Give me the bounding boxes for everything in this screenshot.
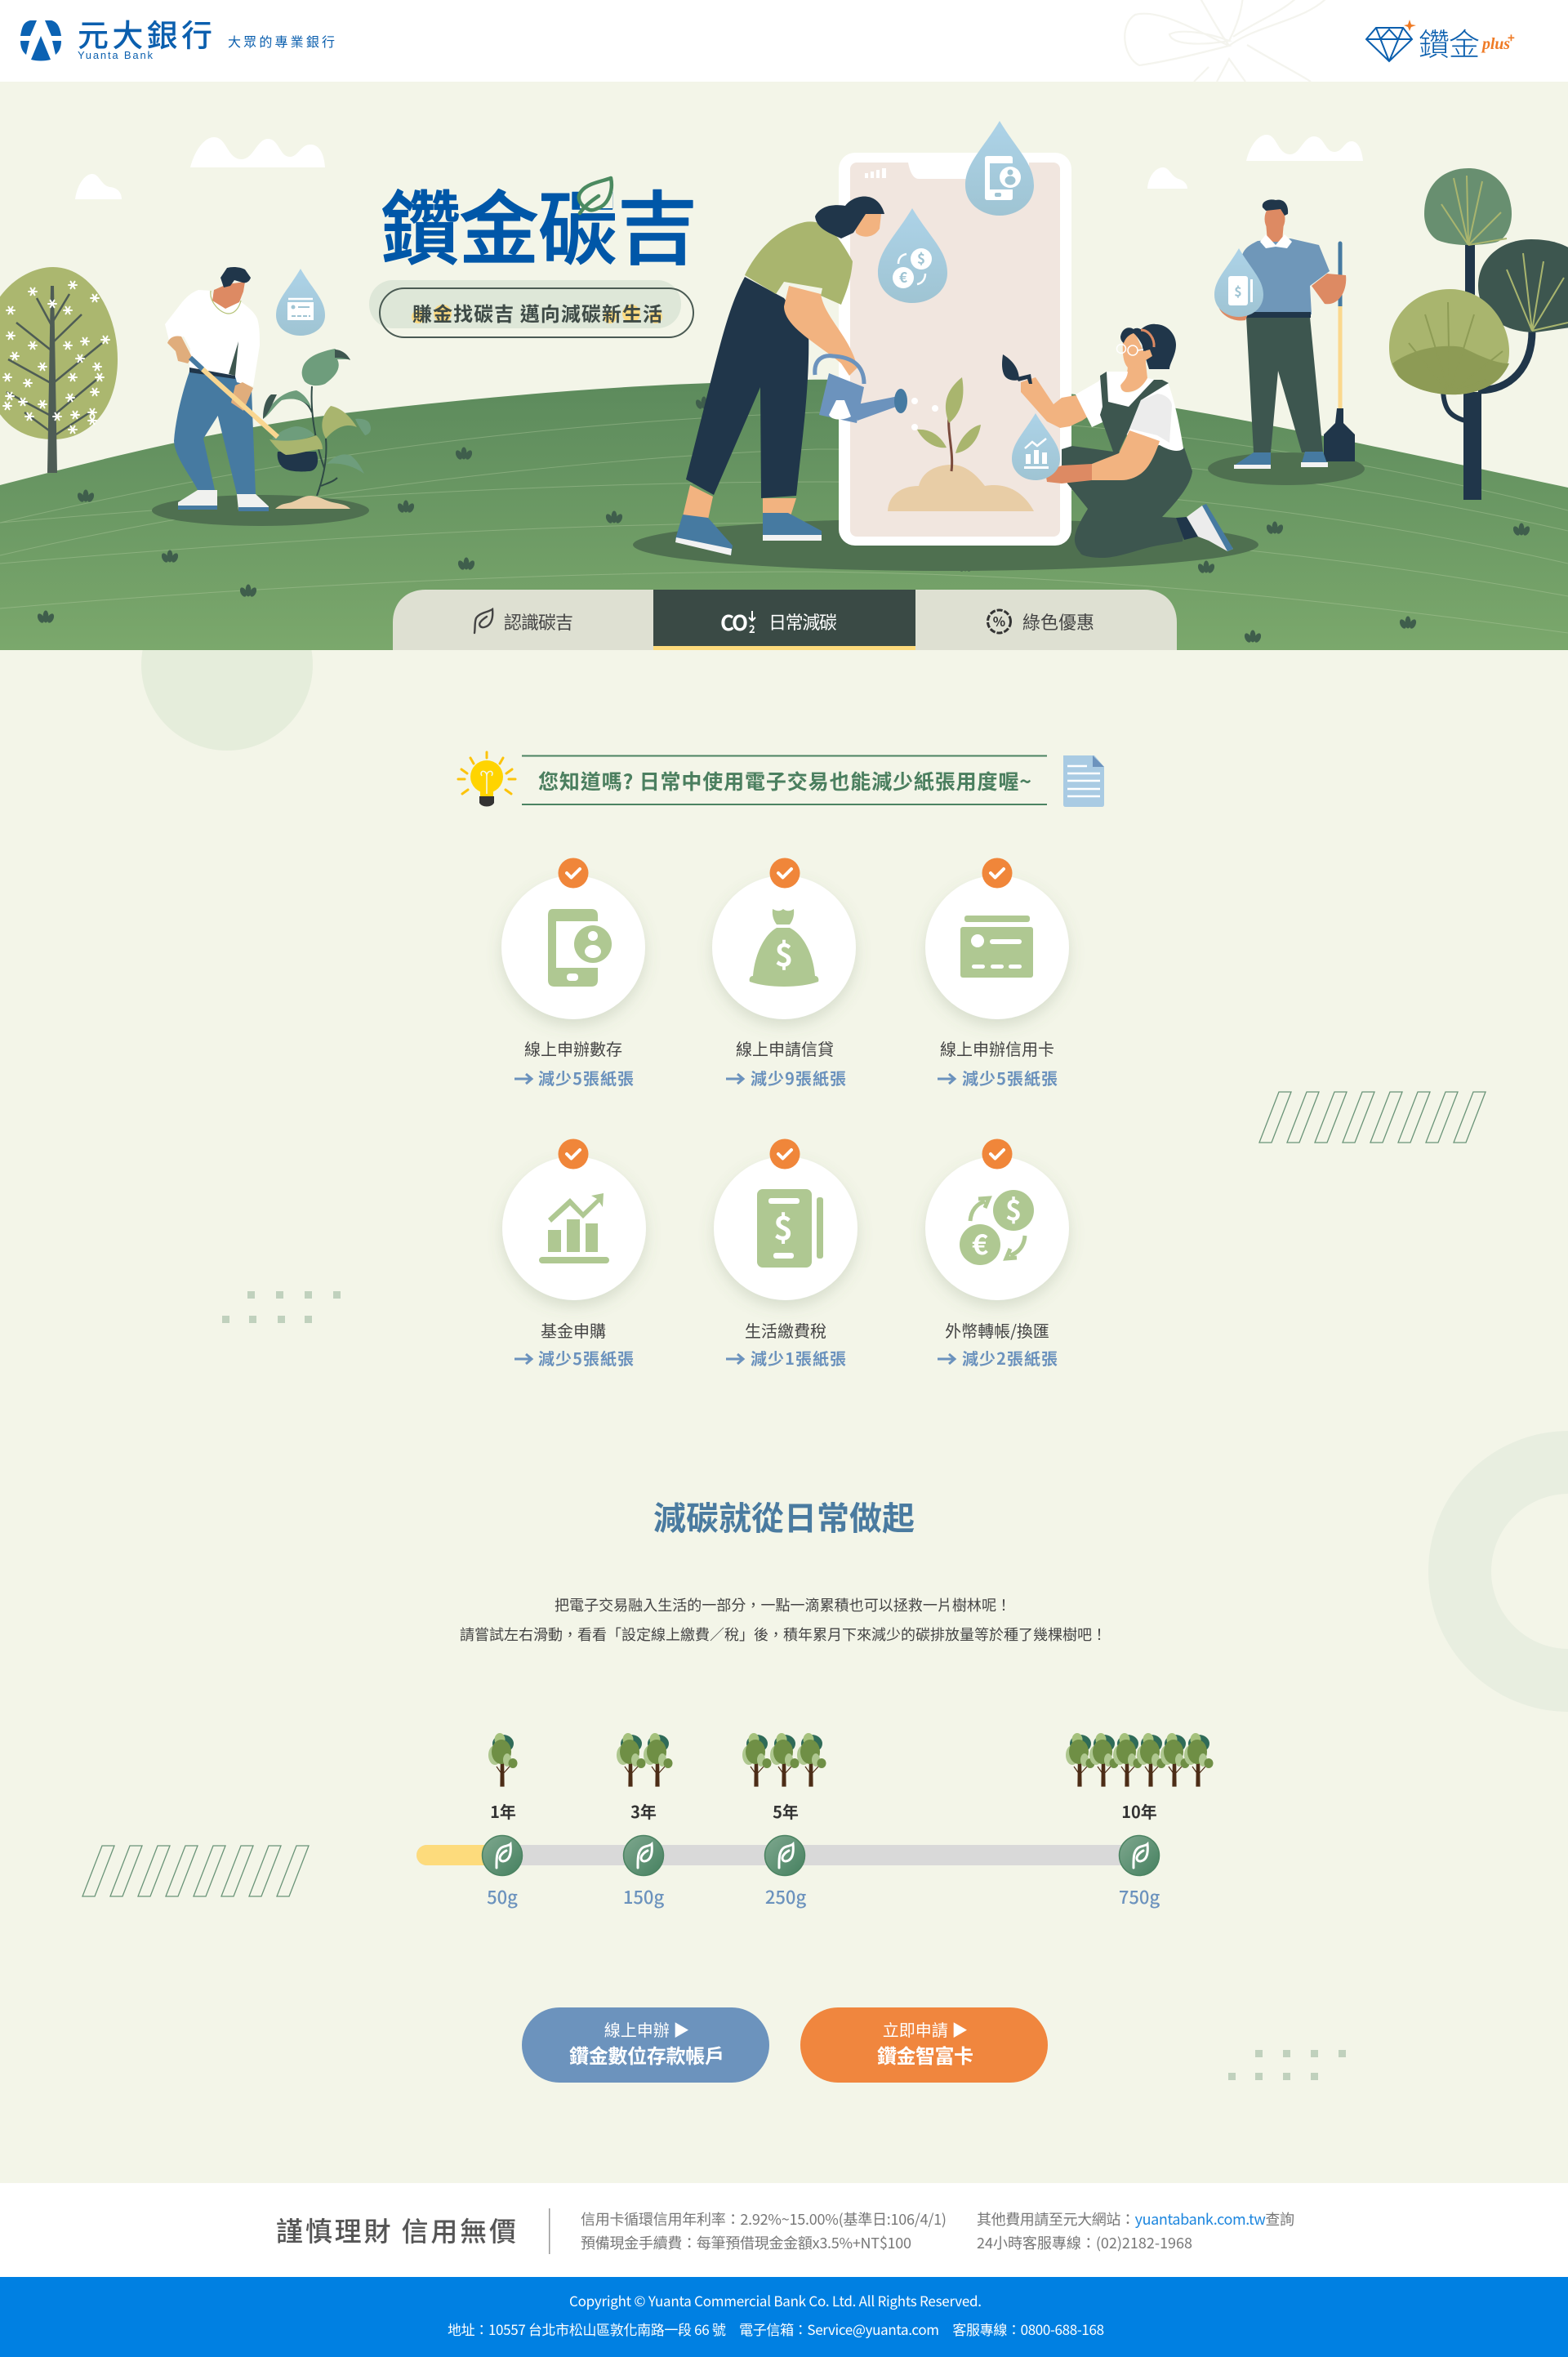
right hand: [1045, 464, 1092, 483]
footer blue bar: 地址：10557 台北市松山區敦化南路一段 66 號 電子信箱：Service@yuanta.com 客服專線：0800-688-168: [448, 2319, 1104, 2339]
button: digital deposit: 鑽金數位存款帳戶: [569, 2040, 724, 2069]
hair back: [1139, 324, 1176, 369]
button: credit card: [800, 2007, 1048, 2083]
drop: bill: [1214, 248, 1263, 317]
hand under drop: [1218, 301, 1250, 321]
did you know banner: 您知道嗎? 日常中使用電子交易也能減少紙張用度喔~: [538, 766, 1031, 795]
shirt shadow: [229, 341, 238, 376]
item: bill payment: 生活繳費稅: [745, 1318, 826, 1342]
year labels: 3年: [630, 1799, 657, 1823]
watermark flower: [1125, 0, 1329, 82]
tab: daily: CO: [720, 607, 748, 637]
face: [1264, 205, 1285, 233]
footer blue bar: Copyright © Yuanta Commercial Bank Co. Ltd. All Rights Reserved.: [569, 2290, 982, 2310]
collar: [211, 291, 241, 314]
arm: [784, 286, 858, 376]
footer notice: 謹慎理財 信用無價: [276, 2210, 516, 2249]
logo: Yuanta Bank: 大眾的專業銀行: [228, 31, 335, 51]
year labels: [490, 1799, 1157, 1823]
intro paragraph: 請嘗試左右滑動，看看「設定線上繳費／稅」後，積年累月下來減少的碳排放量等於種了幾棵樹吧！: [460, 1624, 1107, 1645]
hair: [220, 267, 251, 287]
item: fund subscription: 基金申購: [541, 1318, 606, 1342]
trousers: [174, 372, 256, 494]
subtitle pill: 賺金找碳吉 邁向減碳新生活: [412, 298, 662, 327]
icon: currency exchange: €: [972, 1223, 988, 1263]
man digging with plant: [152, 267, 371, 526]
phone notch: [908, 163, 1029, 179]
neck: [1266, 222, 1284, 242]
hair: [1263, 199, 1288, 216]
decorative hatch left: [82, 1846, 309, 1896]
collar: [1260, 234, 1292, 248]
item: foreign exchange: 減少2張紙張: [962, 1346, 1058, 1370]
gram labels: 750g: [1119, 1883, 1160, 1909]
tab: offers: [988, 608, 1094, 635]
white sweater: [165, 290, 260, 386]
olive crown: [1389, 289, 1509, 394]
right man with shovel: [1208, 199, 1365, 485]
drop: currency: $: [917, 247, 925, 268]
shadow under central figures: [633, 519, 1258, 571]
item: online deposit account: 減少5張紙張: [538, 1066, 634, 1089]
trousers: [1246, 317, 1323, 452]
footer notice: 信用卡循環信用年利率：2.92%~15.00%(基準日:106/4/1): [581, 2208, 947, 2230]
logo: diamond plus: [1366, 20, 1515, 65]
footer blue bar: [0, 2277, 1568, 2357]
shovel: [1324, 243, 1355, 461]
shoes: [1234, 452, 1328, 469]
decorative hatch right: [1259, 1092, 1486, 1143]
seedling mound: [888, 465, 1034, 511]
year labels: 5年: [773, 1799, 799, 1823]
button: credit card: 鑽金智富卡: [877, 2040, 973, 2069]
icon: card: [960, 916, 1033, 978]
icon: bill: $: [773, 1202, 793, 1250]
drop: phone: [965, 121, 1034, 216]
tab: learn: 認識碳吉: [504, 608, 573, 635]
right trees: [1389, 168, 1568, 500]
glasses: [1117, 345, 1143, 355]
plant: [263, 349, 371, 496]
shoe: [1187, 506, 1233, 551]
icon: money bag: [750, 909, 818, 987]
right arm: [1092, 430, 1160, 480]
standing woman watering: [675, 196, 938, 555]
neck and face: [212, 282, 245, 309]
progress: [416, 1845, 502, 1865]
tree icons: [488, 1733, 1214, 1786]
face: [1123, 333, 1152, 369]
hero illustration: [0, 82, 1568, 650]
year labels: 10年: [1121, 1799, 1157, 1823]
gram labels: 150g: [623, 1883, 664, 1909]
icon: currency exchange: [960, 1188, 1034, 1265]
logo: diamond plus: plus: [1481, 35, 1510, 53]
logo: Yuanta Bank: 元大銀行: [78, 11, 212, 56]
white shirt: [1076, 372, 1184, 453]
spade handle: [203, 369, 278, 437]
title leaf: [579, 178, 612, 213]
logo: diamond plus: +: [1508, 29, 1515, 47]
headband: [1141, 330, 1154, 347]
tab: daily: [720, 607, 837, 637]
decorative dots right: [1228, 2050, 1346, 2080]
clouds: [75, 135, 1363, 199]
icon: chart: [539, 1193, 609, 1263]
sock: [1176, 517, 1198, 540]
drop with card icon: [276, 269, 325, 336]
belt: [189, 368, 235, 379]
top crown: [1424, 168, 1512, 245]
left arm: [1021, 377, 1090, 428]
shoes: [675, 513, 822, 555]
did you know banner: [458, 752, 1104, 807]
hill: [0, 380, 1568, 650]
item: fund subscription: [502, 1138, 646, 1370]
drop: chart: [1012, 413, 1060, 480]
soil mound: [275, 496, 350, 509]
item: online loan: 線上申請信貸: [736, 1036, 834, 1060]
grey sleeve: [1129, 394, 1172, 443]
trowel: [1002, 354, 1032, 384]
intro paragraph: [460, 1594, 1107, 1645]
legs: [683, 485, 796, 519]
tab bar: [393, 590, 1177, 650]
title leaf cut-out: [580, 180, 612, 208]
item: online deposit account: [501, 858, 645, 1089]
header bar: [0, 0, 1568, 82]
drop: currency: [878, 208, 947, 303]
shoes: [178, 490, 269, 510]
gram labels: 50g: [487, 1883, 518, 1909]
icon: money bag: $: [775, 930, 793, 975]
signal bars: [865, 168, 886, 178]
green top: [745, 221, 853, 305]
hair: [815, 196, 884, 238]
button: digital deposit: [522, 2007, 769, 2083]
phone: [839, 153, 1071, 546]
hands: [167, 336, 253, 411]
timeline slider: [416, 1733, 1214, 1909]
item: online loan: 減少9張紙張: [751, 1066, 846, 1089]
watering can: [815, 356, 938, 430]
trousers: [686, 277, 808, 498]
logo mark: [20, 20, 61, 60]
polo shirt: [1241, 238, 1330, 314]
icon: currency exchange: $: [1005, 1188, 1022, 1228]
item: online credit card: [925, 858, 1069, 1089]
button: digital deposit: 線上申辦 ▶: [604, 2017, 689, 2041]
icon: phone: [548, 909, 612, 987]
kneeling woman: [1002, 324, 1233, 558]
intro paragraph: 把電子交易融入生活的一部分，一點一滴累積也可以拯救一片樹林呢！: [555, 1594, 1011, 1615]
grass tufts: [36, 397, 1531, 644]
footer notice: 預備現金手續費：每筆預借現金金額x3.5%+NT$100: [581, 2232, 911, 2253]
drop: currency: €: [899, 266, 907, 287]
decorative ring right: [1428, 1431, 1568, 1712]
dark crown: [1478, 239, 1568, 332]
neck: [1120, 363, 1147, 392]
arm: [1312, 274, 1346, 304]
decorative circle top-left: [141, 579, 313, 751]
gram labels: 250g: [765, 1883, 806, 1909]
footer notice: [0, 2183, 1568, 2277]
logo: Yuanta Bank: [20, 11, 335, 61]
title: 鑽金碳吉: [381, 165, 697, 281]
tab: offers: 綠色優惠: [1022, 608, 1094, 635]
icon: document: [1063, 755, 1104, 807]
gram labels: [487, 1883, 1160, 1909]
section heading: 減碳就從日常做起: [653, 1492, 915, 1539]
decorative dots left: [222, 1291, 341, 1323]
tab: daily: 2: [749, 621, 755, 636]
flowering tree left: [0, 267, 118, 473]
item: foreign exchange: [925, 1138, 1069, 1370]
item: bill payment: 減少1張紙張: [751, 1346, 846, 1370]
seedling: [917, 377, 981, 471]
item: bill payment: [714, 1138, 858, 1370]
footer notice: 24小時客服專線：(02)2182-1968: [977, 2232, 1192, 2253]
logo: Yuanta Bank: Yuanta Bank: [78, 49, 154, 61]
face: [854, 214, 881, 237]
hill texture lines: [0, 412, 1568, 633]
year labels: 1年: [490, 1799, 516, 1823]
item: online credit card: 減少5張紙張: [962, 1066, 1058, 1089]
trunks: [1463, 245, 1481, 500]
item: online loan: [712, 858, 856, 1089]
drop: bill: $: [1234, 281, 1242, 301]
nodes: [482, 1836, 1160, 1875]
icon: bill: [757, 1189, 823, 1268]
item: online deposit account: 線上申辦數存: [524, 1036, 622, 1060]
icon: light bulb: [458, 752, 515, 807]
logo: diamond plus: 鑽金: [1419, 20, 1480, 65]
overalls: [1062, 372, 1192, 558]
item: fund subscription: 減少5張紙張: [538, 1346, 634, 1370]
footer notice: 其他費用請至元大網站：yuantabank.com.tw查詢: [977, 2208, 1294, 2230]
subtitle pill: [369, 280, 693, 337]
tab: daily: 日常減碳: [768, 608, 837, 635]
track: [416, 1845, 1135, 1865]
item: foreign exchange: 外幣轉帳/換匯: [945, 1318, 1049, 1342]
tab: offers: %: [993, 611, 1005, 630]
button: credit card: 立即申請 ▶: [883, 2017, 968, 2041]
fringe: [1120, 327, 1150, 351]
item: online credit card: 線上申辦信用卡: [940, 1036, 1054, 1060]
